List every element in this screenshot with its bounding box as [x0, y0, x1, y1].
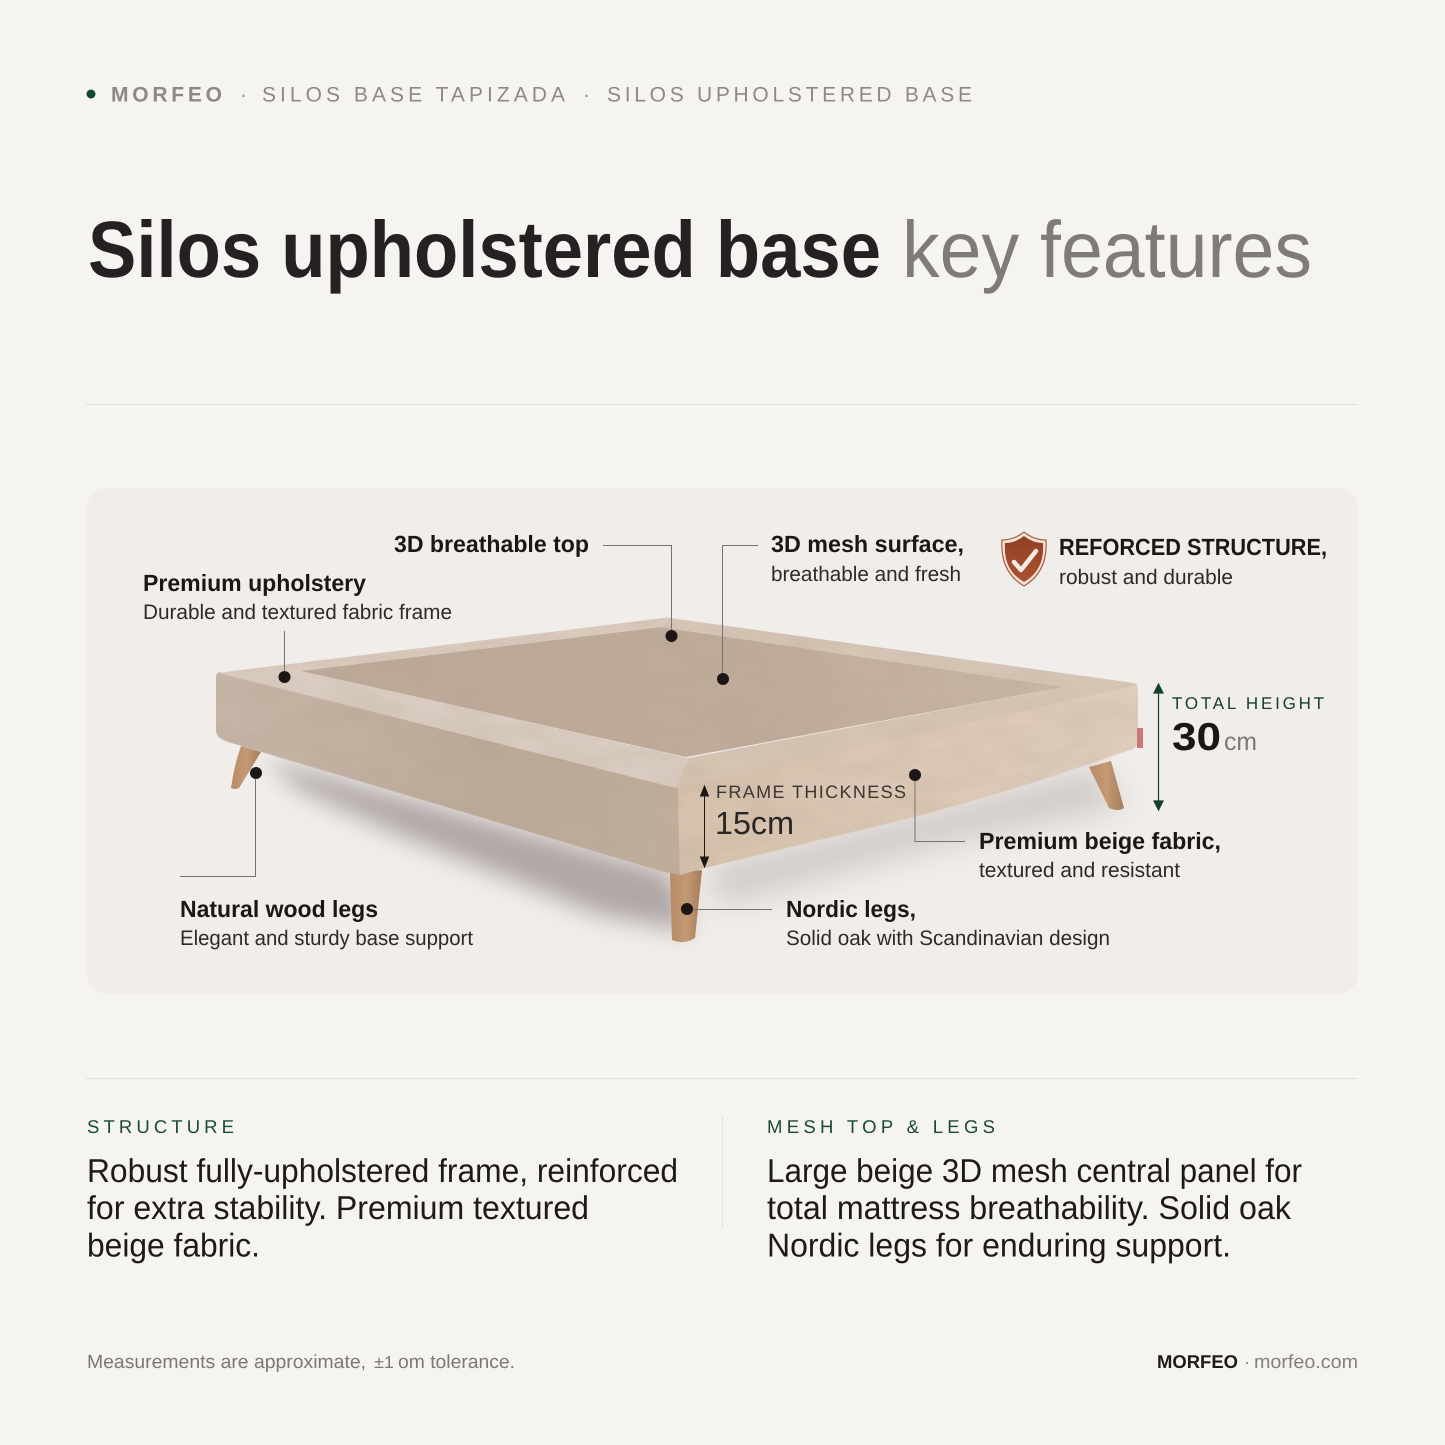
arrow: frame thickness: [700, 786, 708, 867]
text block: structure: STRUCTURE: [87, 1116, 234, 1137]
callout: nordic legs: Solid oak with Scandinavian design: [786, 927, 1110, 950]
footer brand: morfeo.com: [1254, 1352, 1358, 1373]
callout: 3D mesh surface: 3D mesh surface,: [771, 531, 964, 557]
callout: premium beige fabric: Premium beige fabric,: [979, 828, 1221, 854]
arrow: total height: [1154, 684, 1163, 810]
footnote: Measurements are approximate,: [87, 1352, 366, 1373]
product name spanish: SILOS BASE TAPIZADA: [262, 84, 565, 106]
callout: 3D mesh surface: [717, 531, 964, 685]
callout: premium beige fabric: textured and resistant: [979, 859, 1180, 882]
text block: mesh top and legs: Large beige 3D mesh central panel for: [767, 1152, 1302, 1189]
callout: premium upholstery: Premium upholstery: [143, 570, 366, 596]
back right border: [661, 618, 1138, 687]
callout: natural wood legs: Elegant and sturdy base support: [180, 927, 473, 950]
callout: reinforced structure: REFORCED STRUCTURE,: [1059, 534, 1327, 560]
text block: mesh top and legs: Nordic legs for enduring support.: [767, 1226, 1231, 1264]
brand label: MORFEO: [111, 84, 222, 106]
callout: premium upholstery: Durable and textured fabric frame: [143, 601, 452, 624]
left side face: [216, 672, 680, 875]
footer brand: MORFEO: [1157, 1351, 1238, 1372]
callout: nordic legs: Nordic legs,: [786, 896, 916, 922]
text block: structure: [87, 1116, 678, 1264]
callout: 3D breathable top: 3D breathable top: [394, 531, 589, 557]
callout: 3D mesh surface: breathable and fresh: [771, 563, 961, 586]
footnote: om tolerance.: [398, 1352, 515, 1373]
callout: premium beige fabric: [909, 769, 1221, 882]
callout: 3D breathable top: [394, 531, 678, 642]
separator: ·: [583, 84, 590, 106]
footer brand: ·: [1244, 1351, 1250, 1372]
footnote: [87, 1352, 515, 1373]
callout: natural wood legs: [180, 767, 473, 950]
back left border: [218, 618, 670, 673]
product name english: SILOS UPHOLSTERED BASE: [607, 84, 972, 106]
dimension: frame thickness: FRAME THICKNESS: [716, 782, 906, 802]
callout: natural wood legs: Natural wood legs: [180, 896, 378, 922]
dimension: total height: cm: [1224, 728, 1257, 756]
title: key features: [902, 205, 1312, 294]
callout: premium upholstery: [143, 570, 452, 683]
text block: structure: beige fabric.: [87, 1226, 260, 1264]
text block: mesh top and legs: total mattress breathability. Solid oak: [767, 1189, 1291, 1226]
front right border: [676, 685, 1138, 788]
title: Silos upholstered base: [88, 205, 881, 294]
icon: green dot: [86, 90, 96, 98]
red fabric tag: [1137, 728, 1143, 748]
callout: reinforced structure: [1059, 534, 1327, 589]
text block: mesh top and legs: [767, 1116, 1302, 1264]
bed illustration: [216, 617, 1143, 942]
dimension: total height: [1154, 684, 1324, 810]
front leg: [670, 870, 702, 942]
dimension: frame thickness: [700, 782, 906, 867]
dimension: frame thickness: 15cm: [715, 805, 794, 841]
text block: mesh top and legs: MESH TOP & LEGS: [767, 1116, 995, 1137]
text block: structure: for extra stability. Premium textured: [87, 1189, 589, 1226]
footer brand: [1157, 1351, 1358, 1373]
front left border: [218, 671, 688, 788]
right back leg: [1089, 761, 1124, 810]
panel: product diagram: [144, 531, 1326, 952]
separator: ·: [240, 84, 247, 106]
icon: reinforced shield: [1002, 532, 1046, 586]
callout: reinforced structure: robust and durable: [1059, 566, 1233, 589]
dimension: total height: TOTAL HEIGHT: [1172, 694, 1324, 713]
eyebrow header: [86, 84, 972, 106]
text block: structure: Robust fully-upholstered frame, reinforced: [87, 1152, 678, 1189]
footnote: ±1: [374, 1353, 394, 1372]
right side face: [678, 683, 1138, 875]
left back leg: [231, 746, 261, 789]
mesh top panel: [300, 627, 1064, 757]
dimension: total height: 30: [1172, 716, 1221, 759]
callout: nordic legs: [681, 896, 1110, 950]
